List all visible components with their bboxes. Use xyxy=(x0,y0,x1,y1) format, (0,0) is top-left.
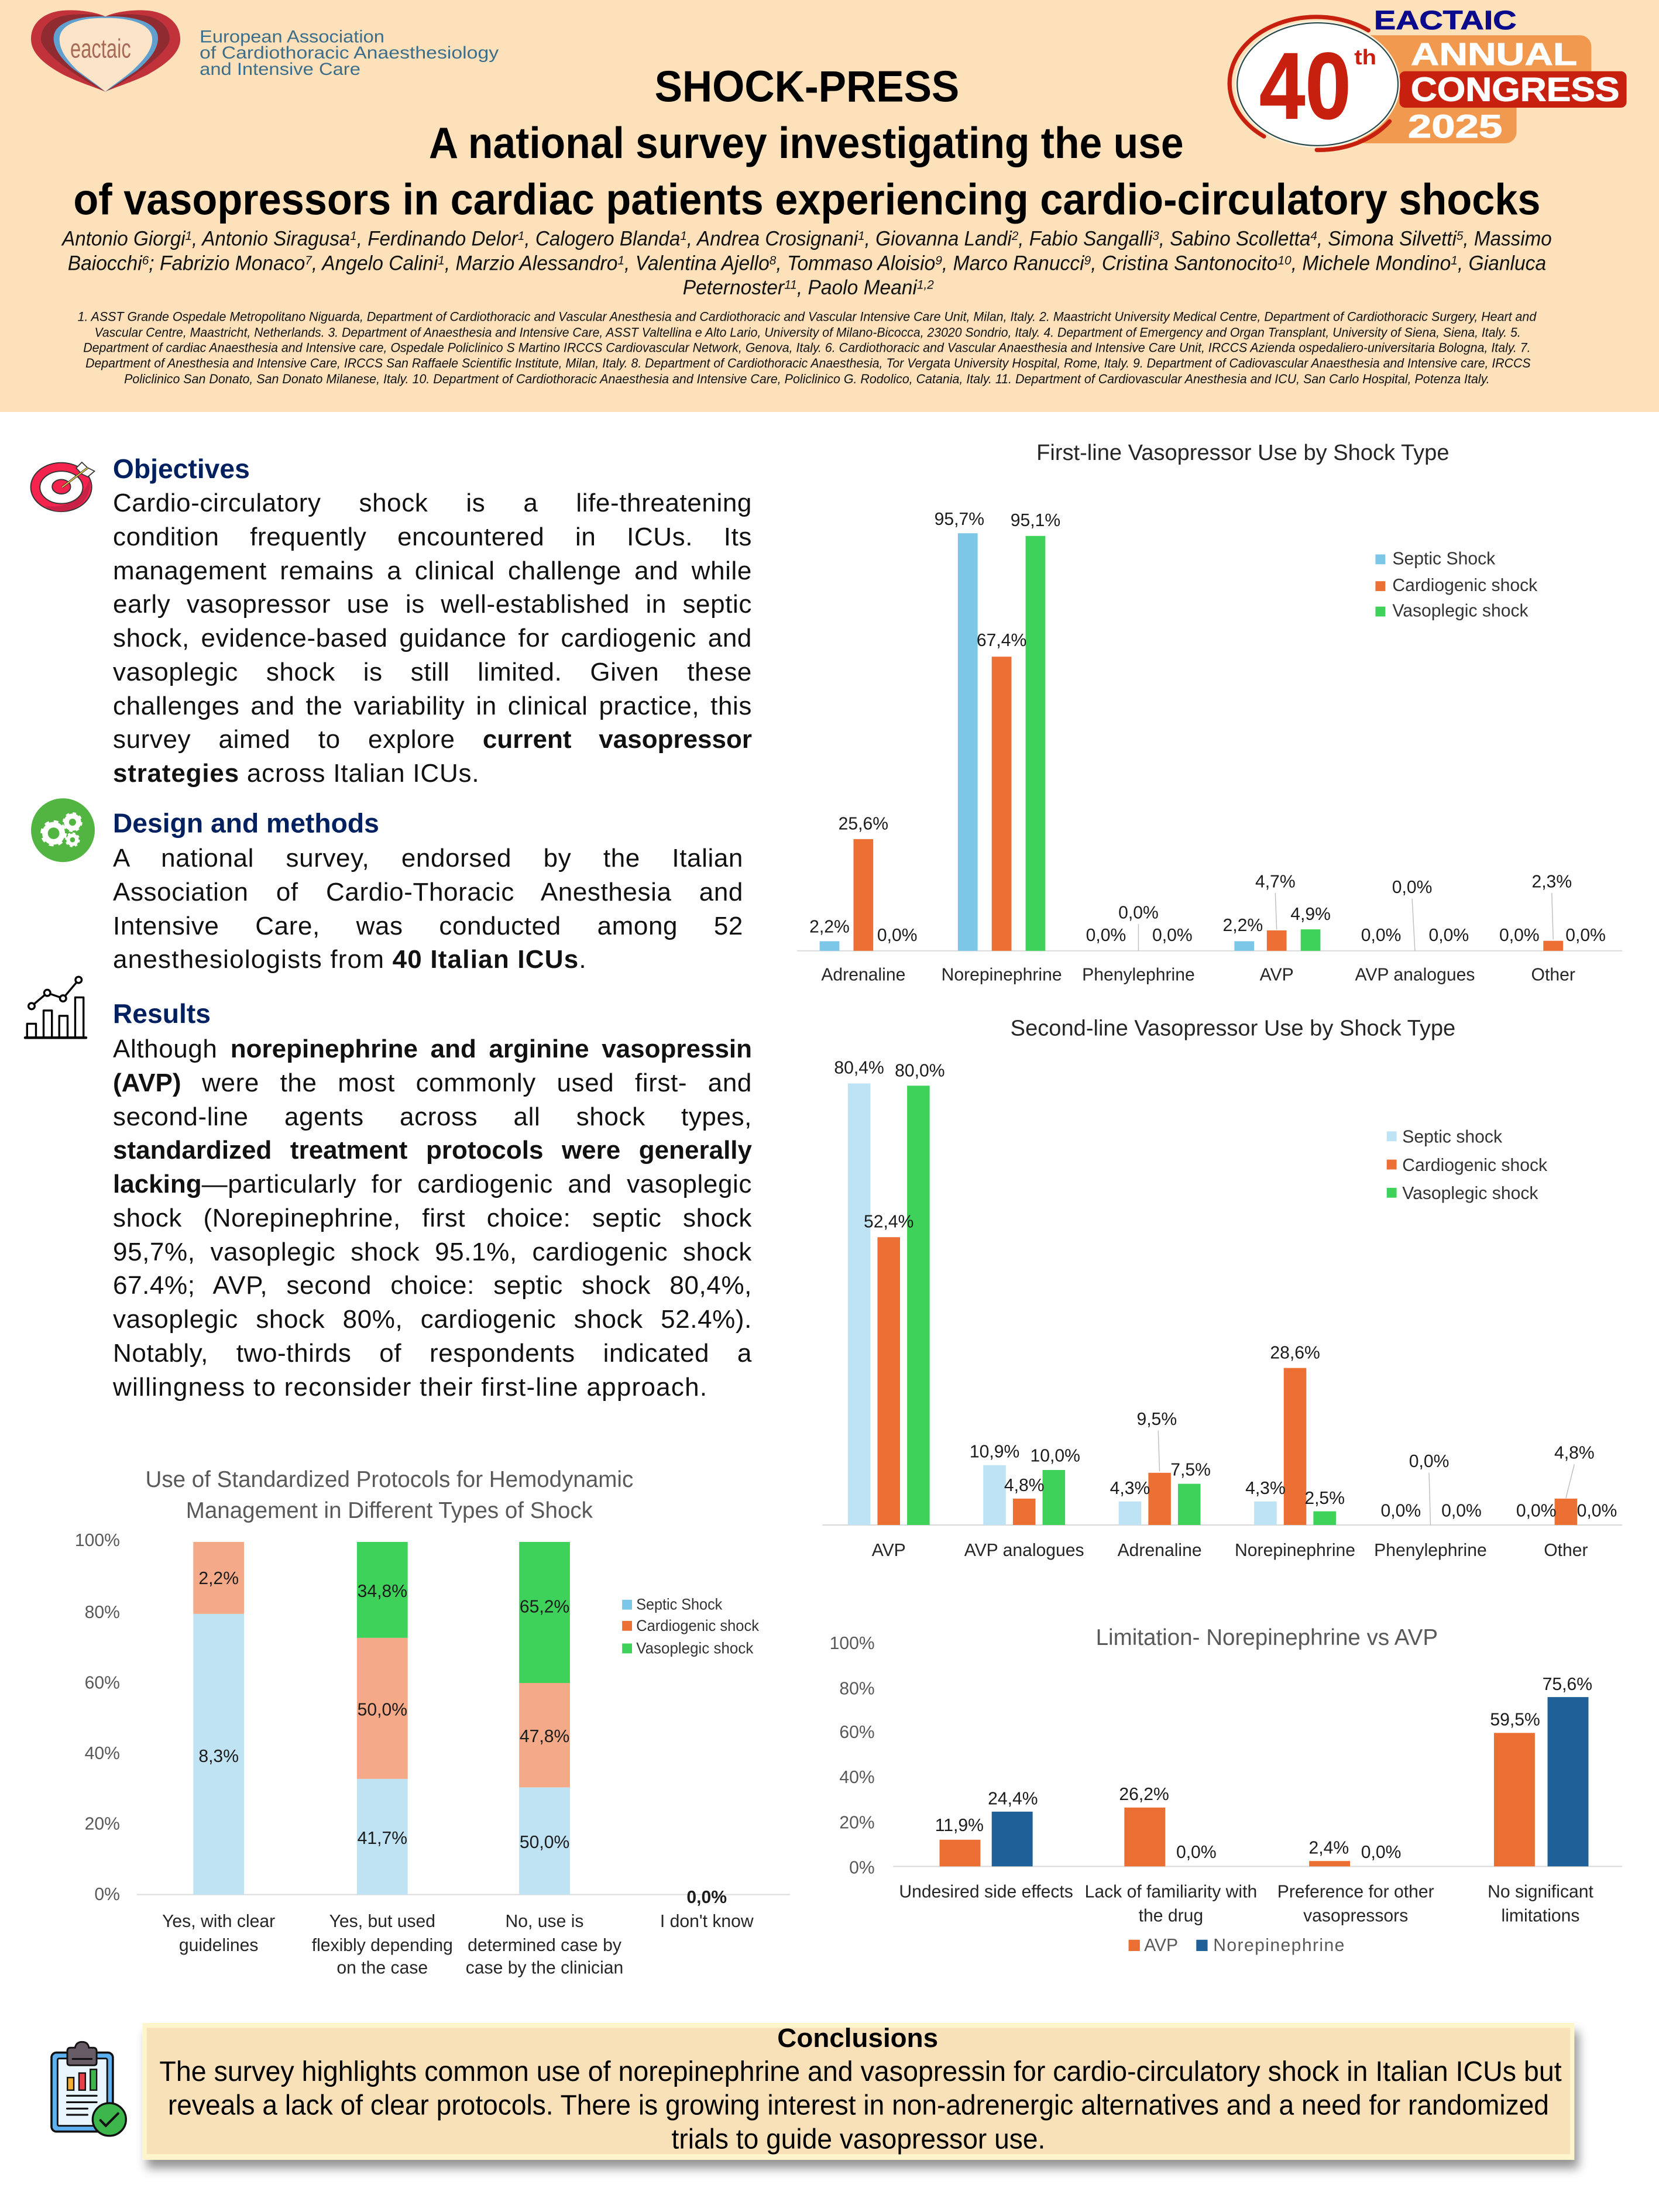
authors xyxy=(61,227,1552,299)
logo: EACTAIC heart xyxy=(31,10,180,92)
category labels: No significant xyxy=(1488,1882,1594,1901)
data labels xyxy=(935,1675,1592,1862)
category labels: determined case by xyxy=(468,1936,621,1955)
authors: , Cristina Santonocito xyxy=(1091,252,1277,275)
authors: 1 xyxy=(858,228,865,243)
text block: results: 95,7%, vasoplegic shock 95.1%, cardiogenic shock xyxy=(113,1237,752,1266)
authors: 9 xyxy=(935,253,942,267)
affiliations xyxy=(78,309,1537,386)
data labels: 10,9% xyxy=(970,1442,1019,1461)
data labels xyxy=(834,1059,1617,1521)
category labels: Other xyxy=(1544,1541,1588,1560)
text block: objectives xyxy=(113,489,752,788)
y axis labels: 100% xyxy=(830,1634,875,1653)
category labels xyxy=(821,965,1575,984)
category labels: Yes, but used xyxy=(329,1912,435,1931)
data labels: 0,0% xyxy=(1118,903,1159,922)
authors: , Antonio Siragusa xyxy=(192,227,350,250)
logo: EACTAIC heart: eactaic xyxy=(70,33,131,63)
category labels xyxy=(872,1541,1588,1560)
authors: 4 xyxy=(1310,228,1317,243)
text block: objectives: management remains a clinical challenge and while xyxy=(113,556,752,585)
authors: , Valentina Ajello xyxy=(624,252,770,275)
chart title xyxy=(145,1467,633,1523)
data labels: 41,7% xyxy=(358,1829,407,1848)
data labels: 2,2% xyxy=(809,917,850,936)
text block: objectives: condition frequently encountered in ICUs. Its xyxy=(113,523,752,551)
icon: results chart xyxy=(25,977,86,1038)
conclusions text xyxy=(159,2056,1562,2155)
data labels: 50,0% xyxy=(520,1833,569,1852)
category labels: No, use is xyxy=(506,1912,584,1931)
category labels: Phenylephrine xyxy=(1374,1541,1487,1560)
y axis labels xyxy=(830,1634,875,1877)
legend: Septic Shock xyxy=(636,1596,723,1613)
category labels: I don't know xyxy=(660,1912,754,1931)
text block: design and methods: Intensive Care, was conducted among 52 xyxy=(113,912,743,940)
data labels: 4,8% xyxy=(1554,1444,1595,1463)
category labels: limitations xyxy=(1502,1906,1579,1925)
title: of vasopressors in cardiac patients experiencing cardio-circulatory shocks xyxy=(73,174,1540,224)
category labels: on the case xyxy=(336,1959,428,1978)
category labels: AVP xyxy=(872,1541,906,1560)
data labels: 0,0% xyxy=(1392,878,1432,897)
data labels: 25,6% xyxy=(839,814,888,833)
data labels: 0,0% xyxy=(686,1888,727,1907)
affiliations: 1. ASST Grande Ospedale Metropolitano Niguarda, Department of Cardiothoracic and Vascular Anesthesia and Cardiothoracic and Vascular Intensive Care Unit, Milan, Italy. 2. Maastricht University Medical Centre, Department of Cardiothoracic Surgery, Heart and xyxy=(78,309,1537,324)
authors: 8 xyxy=(770,253,776,267)
data labels: 2,5% xyxy=(1304,1489,1345,1508)
data labels: 0,0% xyxy=(1381,1502,1421,1521)
data labels xyxy=(198,1569,727,1907)
authors: 3 xyxy=(1152,228,1159,243)
authors: Baiocchi xyxy=(68,252,145,275)
logo: 40th annual congress 2025: ANNUAL xyxy=(1411,37,1577,72)
data labels: 80,0% xyxy=(895,1061,944,1080)
authors: 1 xyxy=(680,228,687,243)
panel: conclusions xyxy=(142,2023,1574,2160)
text block: results: standardized treatment protocols were generally xyxy=(113,1136,752,1165)
category labels: case by the clinician xyxy=(466,1959,623,1978)
category labels: vasopressors xyxy=(1303,1906,1408,1925)
data labels: 2,2% xyxy=(198,1569,239,1588)
logo: 40th annual congress 2025: th xyxy=(1354,45,1376,69)
y axis labels: 80% xyxy=(85,1603,120,1622)
data labels: 0,0% xyxy=(1176,1843,1217,1862)
chart title: Use of Standardized Protocols for Hemodynamic xyxy=(145,1467,633,1492)
authors: 1,2 xyxy=(917,277,934,291)
data labels: 80,4% xyxy=(834,1059,884,1078)
logo: 40th annual congress 2025: EACTAIC xyxy=(1374,5,1517,35)
chart: first-line vasopressor use xyxy=(797,441,1622,984)
authors: , Michele Mondino xyxy=(1292,252,1451,275)
conclusions heading: Conclusions xyxy=(777,2023,938,2053)
legend xyxy=(1375,549,1538,620)
data labels: 65,2% xyxy=(520,1597,569,1616)
authors: , Gianluca xyxy=(1458,252,1546,275)
category labels: flexibly depending xyxy=(312,1936,453,1955)
chart: use of standardized protocols xyxy=(75,1467,790,1978)
y axis labels: 0% xyxy=(849,1858,875,1877)
text block: results xyxy=(113,1035,752,1401)
category labels: Lack of familiarity with xyxy=(1085,1882,1257,1901)
chart: second-line vasopressor use xyxy=(822,1016,1622,1560)
y axis labels: 40% xyxy=(85,1744,120,1763)
authors: 6 xyxy=(142,253,149,267)
data labels: 0,0% xyxy=(1577,1502,1617,1521)
authors: 1 xyxy=(350,228,357,243)
text block: objectives: early vasopressor use is well-established in septic xyxy=(113,590,752,619)
icon: clipboard with check xyxy=(51,2042,126,2136)
legend: Vasoplegic shock xyxy=(1402,1184,1538,1203)
data labels: 2,4% xyxy=(1309,1839,1349,1858)
legend: Septic shock xyxy=(1402,1128,1503,1147)
icon: gears xyxy=(31,798,95,862)
authors: , Simona Silvetti xyxy=(1317,227,1457,250)
title xyxy=(73,62,1540,224)
category labels: Preference for other xyxy=(1277,1882,1434,1901)
authors: , Giovanna Landi xyxy=(865,227,1012,250)
chart: limitation norepinephrine vs AVP xyxy=(830,1625,1622,1955)
data labels: 4,3% xyxy=(1245,1479,1286,1498)
data labels: 4,8% xyxy=(1004,1476,1045,1495)
data labels: 67,4% xyxy=(977,631,1026,650)
data labels: 0,0% xyxy=(1361,1843,1401,1862)
data labels: 0,0% xyxy=(1516,1502,1557,1521)
bars xyxy=(848,1083,1577,1525)
category labels xyxy=(899,1882,1594,1925)
legend: AVP xyxy=(1144,1936,1178,1955)
data labels: 0,0% xyxy=(1409,1452,1449,1471)
authors: 9 xyxy=(1084,253,1091,267)
authors: , Andrea Crosignani xyxy=(687,227,858,250)
text block: objectives: shock, evidence-based guidance for cardiogenic and xyxy=(113,624,752,652)
data labels: 0,0% xyxy=(1152,926,1193,945)
authors: ; Fabrizio Monaco xyxy=(149,252,305,275)
legend: Cardiogenic shock xyxy=(1392,576,1538,595)
conclusions text: The survey highlights common use of norepinephrine and vasopressin for cardio-circulatory shock in Italian ICUs but xyxy=(159,2056,1562,2087)
legend: Septic Shock xyxy=(1392,549,1496,568)
text block: results: shock (Norepinephrine, first choice: septic shock xyxy=(113,1204,752,1232)
category labels: Undesired side effects xyxy=(899,1882,1073,1901)
authors: 11 xyxy=(784,277,797,291)
data labels: 2,2% xyxy=(1223,916,1263,935)
logo text: association name: of Cardiothoracic Anaesthesiology xyxy=(200,43,499,63)
category labels: AVP xyxy=(1260,965,1294,984)
authors: , Calogero Blanda xyxy=(524,227,680,250)
y axis labels: 80% xyxy=(839,1679,875,1698)
y axis labels: 0% xyxy=(94,1885,120,1904)
category labels: guidelines xyxy=(179,1936,258,1955)
chart title: Second-line Vasopressor Use by Shock Type xyxy=(1011,1016,1455,1040)
authors: Antonio Giorgi xyxy=(62,227,191,250)
conclusions text: trials to guide vasopressor use. xyxy=(671,2124,1045,2155)
legend: Vasoplegic shock xyxy=(636,1639,754,1657)
header band xyxy=(0,0,1659,412)
data labels: 28,6% xyxy=(1270,1344,1320,1363)
title: SHOCK-PRESS xyxy=(655,62,959,111)
authors: 10 xyxy=(1277,253,1292,267)
category labels: Phenylephrine xyxy=(1082,965,1195,984)
authors: 7 xyxy=(305,253,312,267)
heading: objectives: Objectives xyxy=(113,454,250,484)
y axis labels: 20% xyxy=(85,1815,120,1834)
data labels: 9,5% xyxy=(1136,1410,1177,1429)
chart title: Limitation- Norepinephrine vs AVP xyxy=(1096,1625,1438,1650)
text block: design and methods: anesthesiologists from 40 Italian ICUs. xyxy=(113,945,587,974)
data labels: 0,0% xyxy=(877,926,918,945)
affiliations: Policlinico San Donato, San Donato Milanese, Italy. 10. Department of Cardiothoracic Anaesthesia and Intensive Care, Policlinico G. Rodolico, Catania, Italy. 11. Department of Cardiovascular Anesthesia and ICU, San Carlo Hospital, Potenza Italy. xyxy=(124,372,1490,386)
title: A national survey investigating the use xyxy=(429,118,1184,167)
bars xyxy=(820,533,1563,951)
data labels: 0,0% xyxy=(1428,926,1469,945)
logo: 40th annual congress 2025: CONGRESS xyxy=(1411,71,1619,109)
data labels: 95,1% xyxy=(1011,511,1060,530)
authors: 1 xyxy=(186,228,192,243)
authors: , Marco Ranucci xyxy=(942,252,1085,275)
authors: , Sabino Scolletta xyxy=(1159,227,1310,250)
category labels xyxy=(162,1912,754,1978)
affiliations: Department of cardiac Anaesthesia and Intensive care, Ospedale Policlinico S Martino IRCCS Cardiovascular Network, Genova, Italy. 6. Cardiothoracic and Vascular Anaesthesia and Intensive Care Unit, IRCCS Azienda ospedaliero-universitaria Bologna, Italy. 7. xyxy=(83,341,1531,355)
legend: Norepinephrine xyxy=(1213,1936,1344,1955)
category labels: Adrenaline xyxy=(821,965,905,984)
data labels: 95,7% xyxy=(935,510,984,529)
data labels: 4,7% xyxy=(1255,872,1296,891)
text block: results: second-line agents across all shock types, xyxy=(113,1102,752,1131)
heading: results: Results xyxy=(113,998,211,1029)
data labels: 2,3% xyxy=(1531,872,1572,891)
text block: design and methods: A national survey, endorsed by the Italian xyxy=(113,844,743,873)
data labels: 47,8% xyxy=(520,1727,569,1746)
text block: objectives: strategies across Italian ICUs. xyxy=(113,759,479,788)
text block: results: willingness to reconsider their first-line approach. xyxy=(113,1373,707,1401)
data labels: 50,0% xyxy=(358,1700,407,1719)
data labels: 0,0% xyxy=(1086,926,1126,945)
data labels: 11,9% xyxy=(935,1816,984,1835)
data labels: 75,6% xyxy=(1543,1675,1592,1694)
authors: 5 xyxy=(1457,228,1464,243)
logo: 40th annual congress 2025: 40 xyxy=(1259,34,1351,139)
text block: objectives: Cardio-circulatory shock is a life-threatening xyxy=(113,489,752,517)
text block: results: 67.4%; AVP, second choice: septic shock 80,4%, xyxy=(113,1271,752,1300)
legend xyxy=(1129,1936,1344,1955)
authors: 1 xyxy=(438,253,445,267)
data labels xyxy=(809,510,1606,945)
data labels: 26,2% xyxy=(1119,1785,1169,1804)
text block: objectives: challenges and the variability in clinical practice, this xyxy=(113,692,752,720)
heading: design and methods: Design and methods xyxy=(113,808,379,838)
authors: , Massimo xyxy=(1463,227,1552,250)
icon: target xyxy=(31,462,95,511)
authors: , Paolo Meani xyxy=(797,276,918,299)
y axis labels: 20% xyxy=(839,1813,875,1832)
y axis labels: 100% xyxy=(75,1531,120,1550)
text block: objectives: survey aimed to explore current vasopressor xyxy=(113,725,752,754)
logo: 40th annual congress 2025: 2025 xyxy=(1408,108,1502,145)
category labels: Yes, with clear xyxy=(162,1912,275,1931)
text block: results: (AVP) were the most commonly used first- and xyxy=(113,1069,752,1097)
category labels: the drug xyxy=(1139,1906,1203,1925)
data labels: 24,4% xyxy=(988,1789,1038,1808)
text block: results: Notably, two-thirds of respondents indicated a xyxy=(113,1339,752,1368)
legend xyxy=(1387,1128,1548,1203)
data labels: 59,5% xyxy=(1490,1710,1540,1729)
authors: 1 xyxy=(518,228,524,243)
logo text: association name xyxy=(200,27,499,79)
data labels: 4,9% xyxy=(1290,905,1331,924)
text block: results: lacking—particularly for cardiogenic and vasoplegic xyxy=(113,1170,752,1198)
data labels: 4,3% xyxy=(1110,1479,1150,1498)
affiliations: Department of Anesthesia and Intensive Care, IRCCS San Raffaele Scientific Institute, Milan, Italy. 8. Department of Cardiothoracic Anaesthesia, Tor Vergata University Hospital, Rome, Italy. 9. Department of Cadiovascular Anaesthesia and Intensive care, IRCCS xyxy=(85,356,1531,370)
logo text: association name: European Association xyxy=(200,27,384,46)
text block: results: vasoplegic shock 80%, cardiogenic shock 52.4%). xyxy=(113,1305,752,1334)
authors: , Ferdinando Delor xyxy=(357,227,518,250)
y axis labels: 40% xyxy=(839,1768,875,1787)
data labels: 0,0% xyxy=(1441,1502,1482,1521)
data labels: 0,0% xyxy=(1361,926,1401,945)
data labels: 34,8% xyxy=(358,1582,407,1601)
category labels: Norepinephrine xyxy=(1235,1541,1355,1560)
text block: results: Although norepinephrine and arginine vasopressin xyxy=(113,1035,752,1063)
legend: Cardiogenic shock xyxy=(636,1617,760,1634)
legend xyxy=(622,1596,760,1657)
category labels: Adrenaline xyxy=(1118,1541,1202,1560)
bars xyxy=(940,1697,1588,1866)
category labels: AVP analogues xyxy=(1355,965,1475,984)
stacked bars xyxy=(193,1542,570,1895)
authors: 1 xyxy=(1451,253,1458,267)
chart title: Management in Different Types of Shock xyxy=(186,1498,593,1523)
affiliations: Vascular Centre, Maastricht, Netherlands. 3. Department of Anaesthesia and Intensive Care, ASST Valtellina e Alto Lario, University of Milano-Bicocca, 23020 Sondrio, Italy. 4. Department of Emergency and Organ Transplant, University of Siena, Siena, Italy. 5. xyxy=(95,325,1521,340)
conclusions text: reveals a lack of clear protocols. There is growing interest in non-adrenergic alternatives and a need for randomized xyxy=(168,2090,1549,2121)
data labels: 0,0% xyxy=(1565,926,1606,945)
authors: , Fabio Sangalli xyxy=(1018,227,1153,250)
authors: , Marzio Alessandro xyxy=(445,252,617,275)
data labels: 0,0% xyxy=(1499,926,1540,945)
chart title: First-line Vasopressor Use by Shock Type xyxy=(1036,441,1450,465)
authors: Peternoster xyxy=(683,276,788,299)
category labels: AVP analogues xyxy=(964,1541,1084,1560)
data labels: 8,3% xyxy=(198,1747,239,1766)
authors: 1 xyxy=(617,253,624,267)
y axis labels xyxy=(75,1531,120,1904)
text block: design and methods: Association of Cardio-Thoracic Anesthesia and xyxy=(113,878,743,906)
legend: Cardiogenic shock xyxy=(1402,1156,1548,1175)
authors: , Tommaso Aloisio xyxy=(776,252,935,275)
legend: Vasoplegic shock xyxy=(1392,601,1529,620)
logo: 40th annual congress 2025 xyxy=(1229,5,1627,150)
category labels: Other xyxy=(1531,965,1575,984)
logo text: association name: and Intensive Care xyxy=(200,60,360,79)
authors: 2 xyxy=(1011,228,1018,243)
data labels: 52,4% xyxy=(864,1212,913,1231)
text block: objectives: vasoplegic shock is still limited. Given these xyxy=(113,658,752,686)
category labels: Norepinephrine xyxy=(942,965,1062,984)
y axis labels: 60% xyxy=(839,1723,875,1742)
y axis labels: 60% xyxy=(85,1674,120,1693)
data labels: 7,5% xyxy=(1170,1461,1211,1480)
authors: , Angelo Calini xyxy=(312,252,438,275)
data labels: 10,0% xyxy=(1031,1446,1080,1465)
text block: design and methods xyxy=(113,844,743,974)
